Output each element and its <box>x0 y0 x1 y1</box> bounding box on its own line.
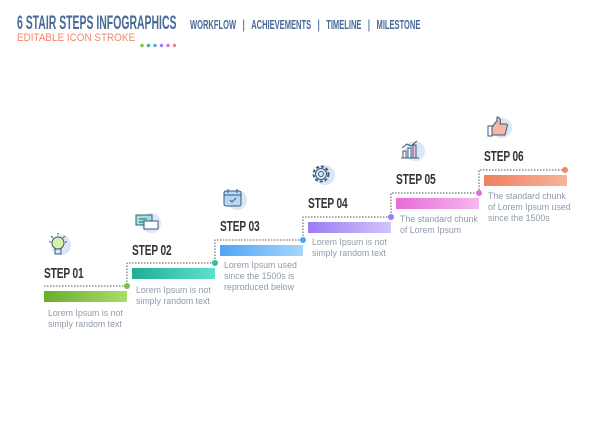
step 6: STEP 06 <box>484 149 523 165</box>
header tags: WORKFLOW | ACHIEVEMENTS | TIMELINE | MILESTONE <box>190 17 420 32</box>
step 5 <box>396 140 479 235</box>
color dots <box>140 44 176 48</box>
icon: chart <box>401 140 425 161</box>
step 3: STEP 03 <box>220 219 259 235</box>
step 6: The standard chunk of Lorem Ipsum used since the 1500s <box>488 191 571 223</box>
step 1: STEP 01 <box>44 266 83 282</box>
step 4 <box>308 165 391 258</box>
icon: gear <box>312 165 335 185</box>
step 6 <box>484 116 571 223</box>
step 3 <box>220 189 303 292</box>
icon: calendar <box>224 189 247 210</box>
icon: thumbs up <box>488 116 512 138</box>
step 5: The standard chunk of Lorem Ipsum <box>400 214 478 235</box>
icon: chat <box>136 213 161 233</box>
icon: lightbulb <box>49 233 71 255</box>
step 1 <box>44 233 127 329</box>
step 2 <box>132 213 215 306</box>
title: 6 STAIR STEPS INFOGRAPHICS <box>17 13 176 34</box>
step 1: Lorem Ipsum is not simply random text <box>48 308 123 329</box>
step 4: STEP 04 <box>308 196 347 212</box>
step 2: Lorem Ipsum is not simply random text <box>136 285 211 306</box>
step 2: STEP 02 <box>132 243 171 259</box>
step 3: Lorem Ipsum used since the 1500s is reproduced below <box>224 260 297 292</box>
subtitle: EDITABLE ICON STROKE <box>17 32 135 44</box>
step 4: Lorem Ipsum is not simply random text <box>312 237 387 258</box>
step 5: STEP 05 <box>396 172 435 188</box>
